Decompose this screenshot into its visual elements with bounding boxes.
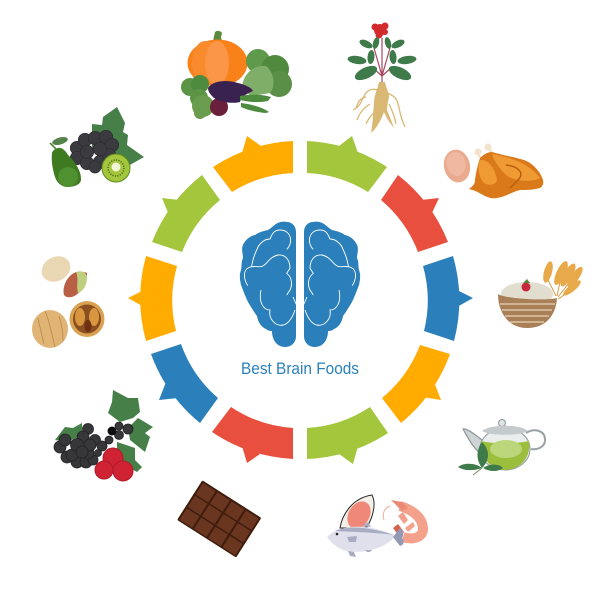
icon: pumpkin and vegetables [181,31,292,119]
segment: green upper left [152,175,220,252]
brain left hemisphere [240,222,297,347]
segment: orange lower right [382,345,450,423]
brain right hemisphere [303,222,360,347]
segment: blue right [423,256,473,341]
segment: orange left [128,256,177,341]
icon: tea pot [458,420,545,475]
ring of arrow segments [128,136,473,464]
icon: chocolate bar [177,480,261,558]
icon: porridge bowl with wheat [498,259,585,328]
icon: nuts [32,251,104,348]
segment: green top right [307,136,387,192]
icon: brain [240,222,360,347]
segment: red upper right [381,175,448,252]
title: Best Brain Foods [241,359,359,378]
segment: red bottom left [212,407,293,463]
segment: green bottom right [307,407,388,464]
icon: ginseng plant [347,22,417,133]
icon: avocado, grapes and kiwi [50,107,144,187]
segment: blue lower left [151,344,218,423]
segment: orange top left [213,136,293,192]
icon: egg and roast chicken [441,144,543,198]
icon: fish, oyster and shrimp [327,495,423,557]
icon: black grapes, currants and red berries [54,390,153,481]
